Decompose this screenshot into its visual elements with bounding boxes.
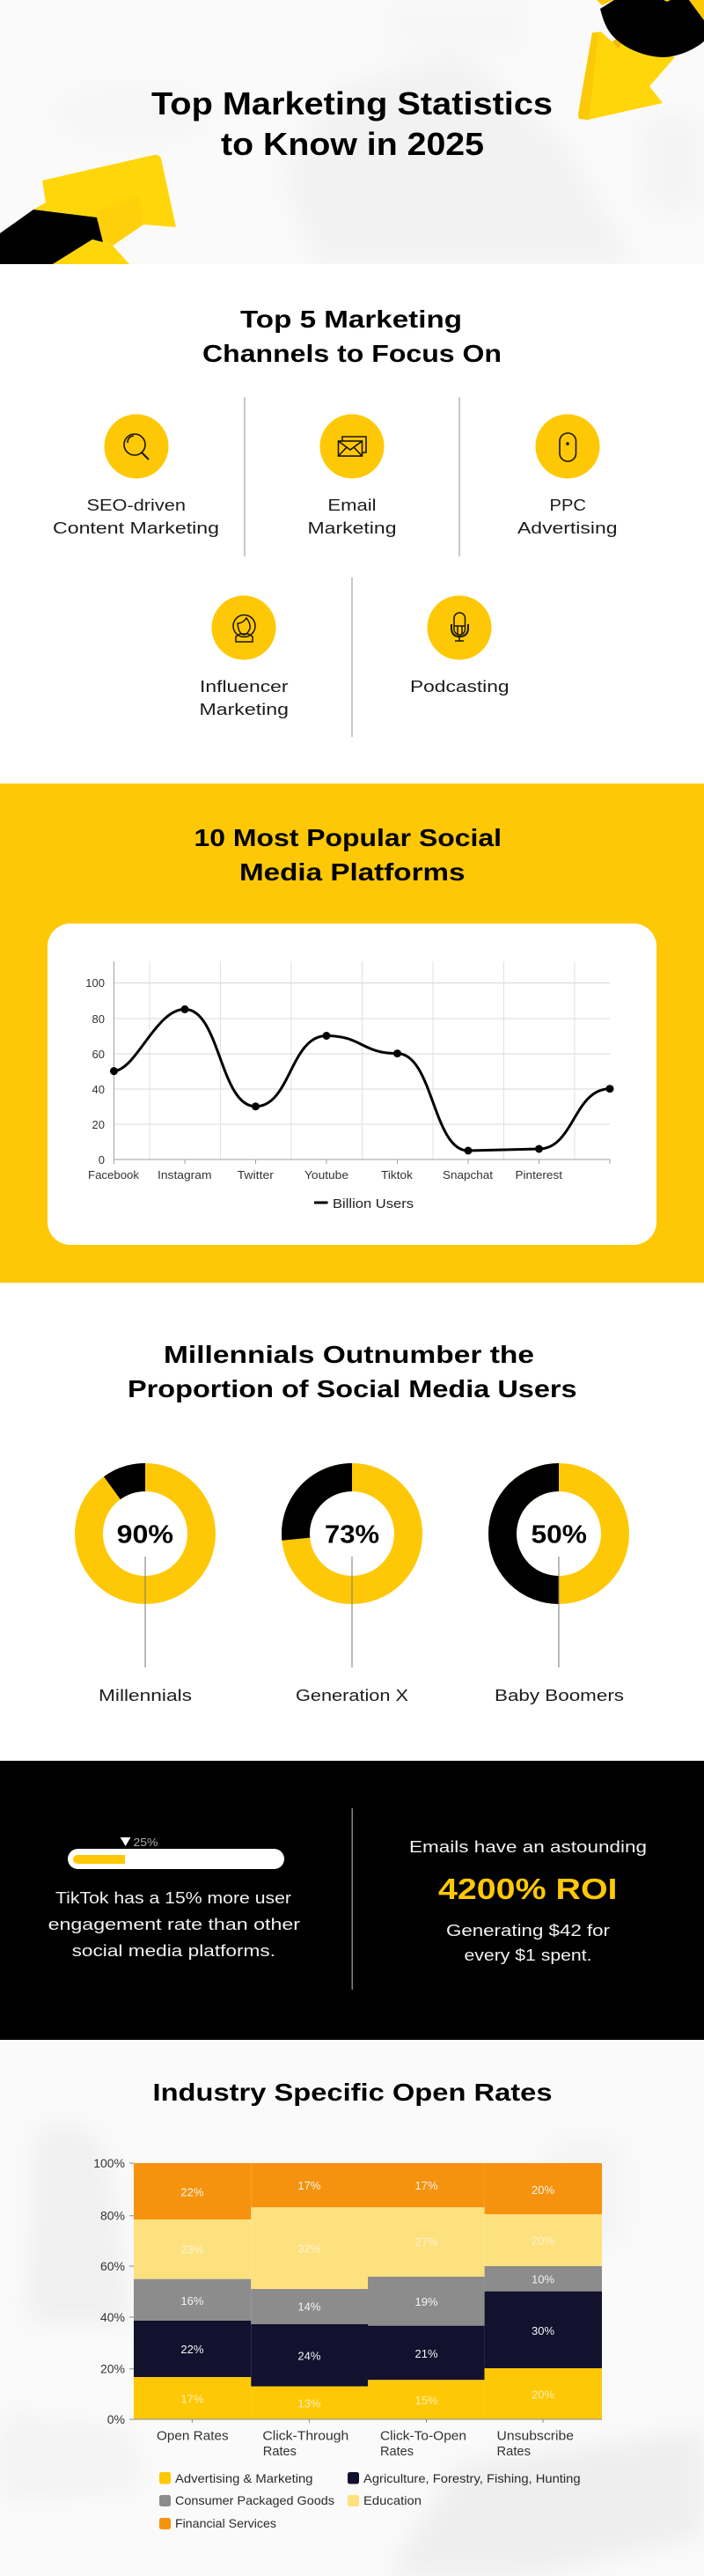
text: influencer marketing: Influencer [200,678,289,696]
column: unsubscribe rates [485,2163,602,2419]
column: open rates: 22% [180,2185,204,2199]
heading: millennials: Proportion of Social Media Users [128,1375,577,1402]
title: Top Marketing Statistics [151,85,553,121]
column: unsubscribe rates: 10% [532,2273,554,2285]
text: influencer marketing [199,678,289,718]
donut: baby boomers 50%: 50% [532,1521,587,1549]
column: click-through rates: 24% [297,2349,321,2363]
heading: top 5 channels: Top 5 Marketing [240,305,462,333]
heading: top 5 channels [202,305,502,367]
icon: influencer [211,595,276,660]
y axis labels: 20% [100,2362,125,2376]
column: click-to-open rates: 17% [414,2179,438,2192]
text: TikTok engagement: TikTok has a 15% more user [55,1889,291,1907]
text: email ROI: 4200% ROI [438,1873,618,1905]
y axis labels [85,976,105,1167]
column: click-through rates: 17% [297,2179,321,2192]
panel: top 5 channels [0,264,704,784]
y axis labels: 80 [92,1012,105,1026]
x axis labels: Rates [496,2445,531,2459]
x axis labels: Twitter [238,1168,275,1181]
donut: baby boomers 50% [495,1477,624,1704]
x axis labels: Open Rates [157,2430,229,2444]
text: SEO-driven content marketing: Content Marketing [53,519,219,537]
donut: millennials 90% [89,1477,202,1704]
x axis labels: Rates [263,2445,297,2459]
column: click-to-open rates: 27% [414,2235,438,2248]
line chart [85,961,614,1211]
x axis labels: Tiktok [381,1168,414,1181]
y axis labels [93,2156,125,2426]
title: to Know in 2025 [221,126,484,162]
heading: social media platforms: Media Platforms [239,858,465,886]
panel: black stats band [0,1761,704,2040]
text: PPC advertising: Advertising [517,519,618,537]
column: click-through rates: 14% [297,2300,321,2314]
legend [159,2471,581,2530]
heading: millennials: Millennials Outnumber the [164,1341,534,1368]
progress bar 25%: 25% [134,1836,158,1849]
x axis labels [88,1168,562,1181]
x axis labels: Click-To-Open [380,2430,466,2444]
donut: generation X 73% [296,1477,408,1704]
title [151,85,553,162]
y axis labels: 40% [100,2310,125,2324]
icon: bottom left arrow [0,155,176,264]
column: click-through rates: 13% [297,2396,321,2410]
donut: millennials 90%: Millennials [99,1687,192,1704]
stacked bar chart [93,2156,602,2530]
donut: generation X 73%: 73% [325,1521,379,1549]
column: unsubscribe rates: 20% [532,2183,554,2197]
text: email marketing: Email [327,497,377,514]
chart card [48,924,656,1245]
text: PPC advertising [517,497,618,537]
x axis labels: Snapchat [443,1168,493,1181]
hero panel [0,0,704,264]
column: click-to-open rates: 21% [414,2347,438,2360]
text: influencer marketing: Marketing [199,701,289,718]
column: click-through rates [251,2163,368,2419]
heading: millennials [128,1341,577,1402]
legend: Financial Services [175,2516,276,2530]
line: billion users [114,1009,610,1151]
legend: Advertising & Marketing [175,2471,313,2485]
legend: Consumer Packaged Goods [175,2493,334,2507]
y axis labels: 100 [85,976,105,990]
y axis labels: 0% [107,2412,125,2426]
column: unsubscribe rates: 30% [532,2324,554,2337]
text: email ROI: Generating $42 for [446,1922,610,1939]
legend: Agriculture, Forestry, Fishing, Hunting [363,2471,581,2485]
text: email ROI [409,1838,647,1964]
column: unsubscribe rates: 20% [532,2234,554,2247]
heading: open rates: Industry Specific Open Rates [153,2079,553,2106]
heading: social media platforms [194,824,502,886]
text: SEO-driven content marketing: SEO-driven [86,497,186,514]
column: click-to-open rates: 15% [414,2394,438,2407]
progress bar 25% [68,1836,284,1869]
column: open rates: 22% [180,2343,204,2356]
donut: baby boomers 50%: Baby Boomers [495,1687,624,1704]
icon: mouse [535,414,600,479]
y axis labels: 20 [92,1118,105,1131]
icon: top right arrow [578,0,704,120]
x axis labels [157,2430,574,2459]
text: TikTok engagement: social media platforms. [72,1942,275,1960]
text: PPC advertising: PPC [549,497,586,514]
text: email marketing: Marketing [308,519,396,537]
y axis labels: 0 [99,1153,105,1167]
column: click-through rates: 32% [297,2241,321,2256]
icon: envelope [320,414,384,479]
x axis labels: Rates [380,2445,414,2459]
panel: industry open rates [0,2040,704,2576]
data points [110,1005,614,1155]
donut: generation X 73%: Generation X [296,1687,408,1704]
y axis labels: 60 [92,1048,105,1061]
text: TikTok engagement [48,1889,300,1960]
x axis labels: Click-Through [262,2430,348,2444]
column: open rates: 23% [180,2243,204,2256]
text: SEO-driven content marketing [53,497,219,537]
x axis labels: Facebook [88,1168,140,1181]
icon: magnifier [104,414,169,479]
legend: billion users: Billion Users [333,1196,414,1211]
icon: microphone [428,595,491,660]
text: podcasting: Podcasting [410,678,509,696]
heading: social media platforms: 10 Most Popular Social [194,824,502,851]
y axis labels: 60% [100,2259,125,2273]
panel: social media platforms [0,784,704,1283]
legend: Education [363,2493,422,2507]
column: open rates: 16% [180,2294,204,2307]
text: TikTok engagement: engagement rate than other [48,1916,300,1933]
y axis labels: 80% [100,2209,125,2223]
text: email marketing [308,497,396,537]
x axis labels: Instagram [158,1168,211,1181]
column: unsubscribe rates: 20% [532,2388,554,2402]
x axis labels: Youtube [304,1168,348,1181]
column: click-to-open rates: 19% [414,2295,438,2308]
donut: millennials 90%: 90% [117,1521,173,1549]
x axis labels: Pinterest [516,1168,562,1181]
column: open rates [134,2163,251,2419]
panel: millennials [0,1283,704,1761]
y axis labels: 40 [92,1083,105,1096]
column: open rates: 17% [180,2393,204,2405]
heading: top 5 channels: Channels to Focus On [202,340,502,367]
text: email ROI: every $1 spent. [465,1947,591,1964]
text: email ROI: Emails have an astounding [409,1838,647,1856]
x axis labels: Unsubscribe [496,2430,574,2444]
y axis labels: 100% [93,2156,125,2170]
column: click-to-open rates [368,2163,485,2419]
